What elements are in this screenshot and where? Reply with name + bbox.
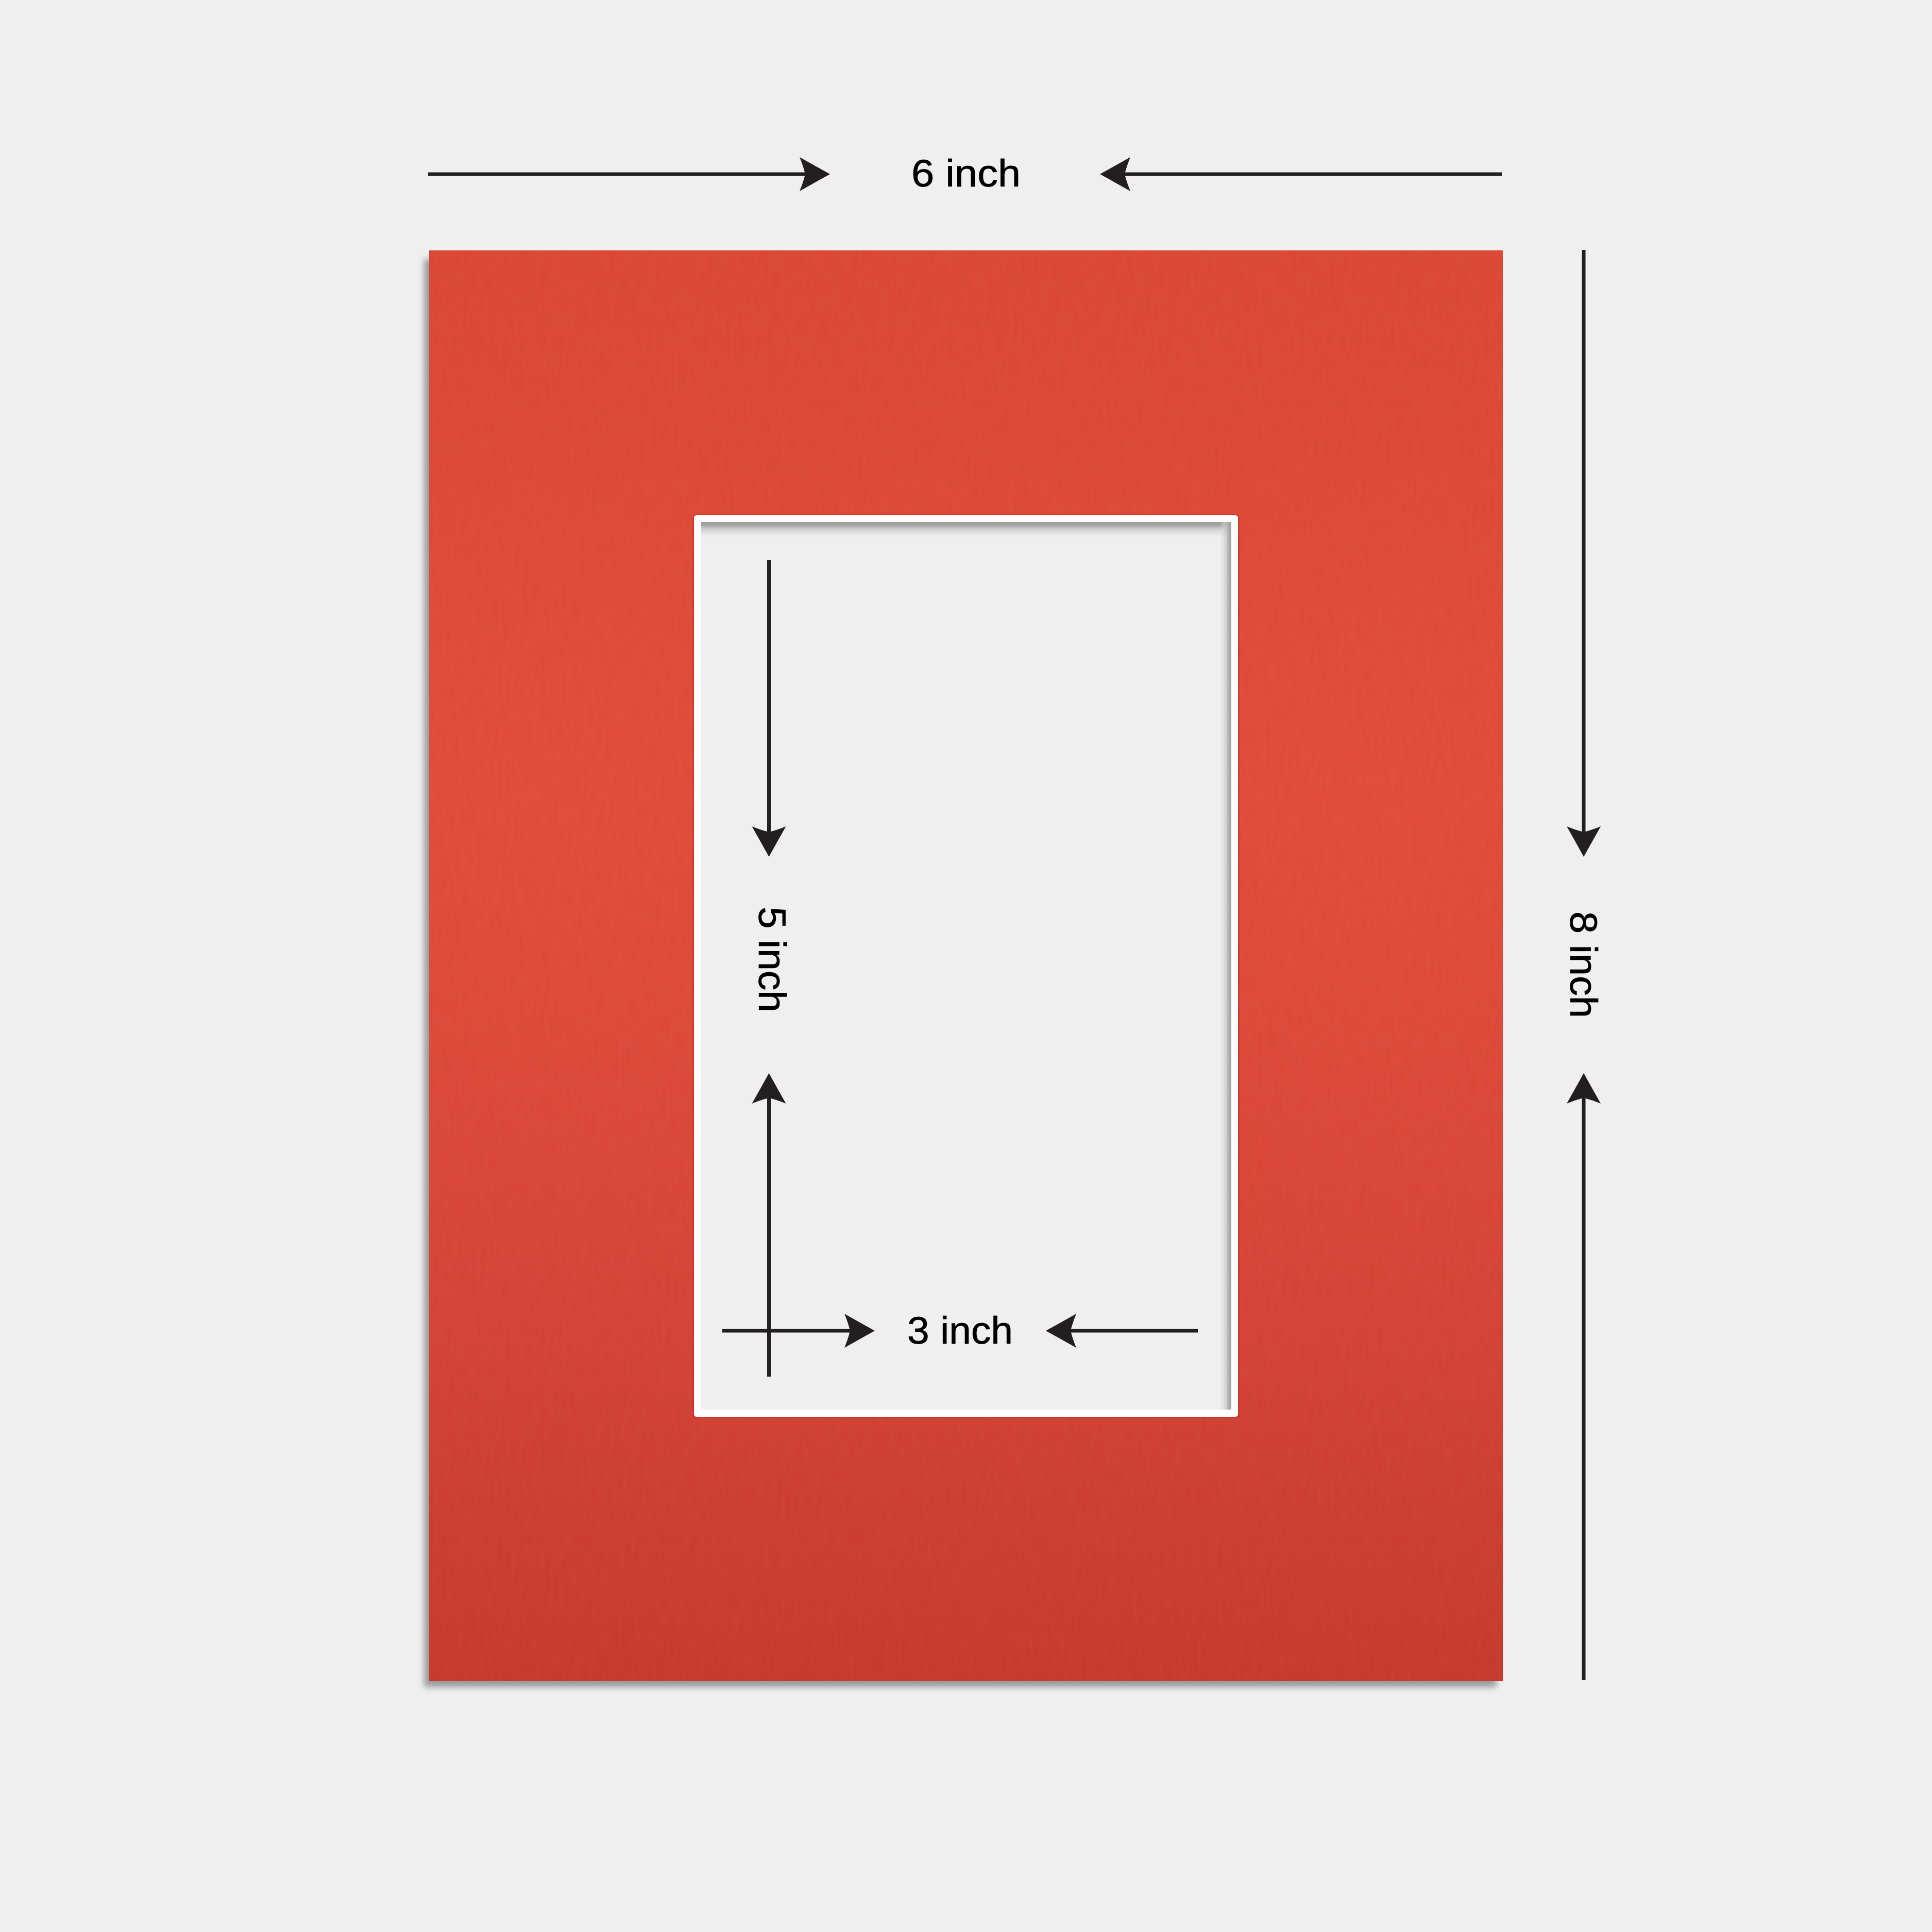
window interior xyxy=(701,522,1231,1410)
arrow: left pointing right xyxy=(722,1314,875,1348)
mat colour variation xyxy=(429,250,1503,1681)
label: 8 inch: 8 inch xyxy=(1562,911,1605,1018)
window top inner shadow xyxy=(701,522,1231,537)
arrow: right pointing left xyxy=(1046,1314,1198,1348)
window right inner shadow xyxy=(1220,522,1231,1410)
window height dimension: 5 inch xyxy=(751,560,793,1377)
arrow: top pointing down xyxy=(752,560,786,857)
label: 3 inch: 3 inch xyxy=(907,1309,1013,1352)
label: 6 inch: 6 inch xyxy=(911,152,1021,195)
arrow: top pointing down xyxy=(1567,250,1601,857)
width dimension: 6 inch xyxy=(428,152,1502,195)
window opening xyxy=(694,515,1238,1417)
label: 5 inch: 5 inch xyxy=(751,907,793,1012)
arrow: bottom pointing up xyxy=(752,1073,786,1377)
mat shadow xyxy=(424,259,1497,1687)
height dimension: 8 inch xyxy=(1562,250,1605,1680)
arrow: left pointing right xyxy=(428,157,830,191)
arrow: right pointing left xyxy=(1100,157,1502,191)
arrow: bottom pointing up xyxy=(1567,1073,1601,1680)
window width dimension: 3 inch xyxy=(722,1309,1198,1352)
red mat panel xyxy=(429,250,1503,1681)
paper texture xyxy=(429,250,1503,1681)
